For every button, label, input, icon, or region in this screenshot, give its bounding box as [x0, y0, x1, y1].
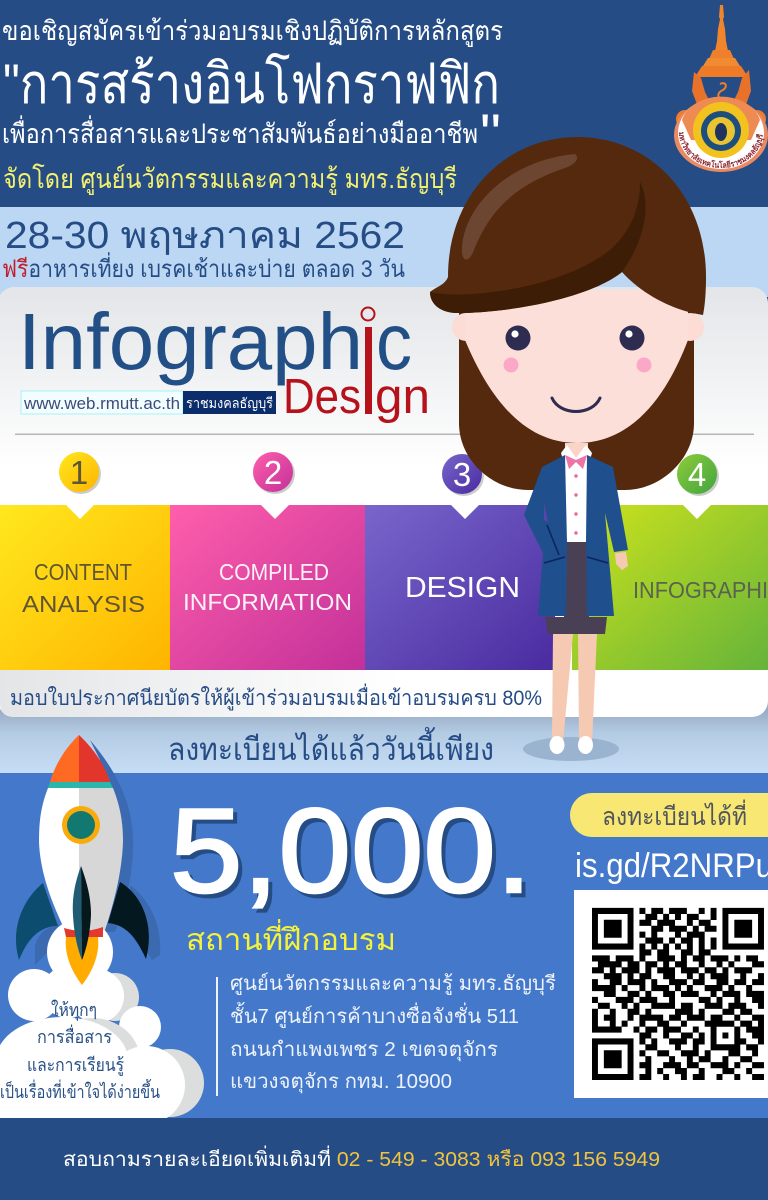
body left	[39, 788, 79, 930]
window	[62, 806, 100, 844]
subtitle: course purpose: เพื่อการสื่อสารและประชาสัมพันธ์อย่างมืออาชีพ	[2, 115, 478, 149]
price: 5,000.	[170, 784, 532, 918]
shirt buttons	[574, 474, 578, 535]
step 2 column: compiled information: COMPILED	[219, 559, 329, 585]
venue address: ถนนกำแพงเพชร 2 เขตจตุจักร	[230, 1039, 498, 1062]
rocket illustration	[0, 735, 204, 1124]
step number 3	[442, 454, 484, 496]
heading: invitation line: ขอเชิญสมัครเข้าร่วมอบรมเชิงปฏิบัติการหลักสูตร	[2, 16, 503, 47]
website tag	[21, 391, 276, 414]
rocket caption: เป็นเรื่องที่เข้าใจได้ง่ายขึ้น	[0, 1079, 160, 1102]
exhaust cloud second tier	[8, 966, 139, 1023]
QR code	[574, 890, 768, 1098]
step 2 column: compiled information	[170, 505, 365, 670]
step 4 column: infographic	[572, 505, 768, 670]
free meals note: ฟรีอาหารเที่ยง เบรคเช้าและบ่าย ตลอด 3 วัน	[2, 252, 405, 283]
eyes	[506, 326, 530, 350]
venue heading: สถานที่ฝึกอบรม	[186, 919, 396, 957]
hair highlight	[462, 154, 577, 260]
organiser line: จัดโดย ศูนย์นวัตกรรมและความรู้ มทร.ธัญบุรี	[3, 163, 457, 196]
front hair	[430, 137, 706, 315]
character illustration	[430, 137, 706, 761]
title: course name: "การสร้างอินโฟกราฟฟิก	[3, 52, 500, 115]
Infographic wordmark: c	[376, 297, 412, 386]
hand	[615, 552, 628, 570]
step 1 column: content analysis	[0, 505, 170, 670]
registration pill	[570, 793, 768, 837]
step 3 column: design	[365, 505, 555, 670]
university logo	[674, 5, 768, 172]
footer background	[0, 1118, 768, 1200]
fringe shadow	[430, 182, 646, 313]
body right	[79, 788, 123, 930]
flame	[66, 937, 98, 985]
cheeks	[504, 358, 518, 372]
exhaust cloud top puff	[47, 919, 113, 985]
Infographic wordmark: Des	[283, 370, 361, 424]
registration pill: ลงทะเบียนได้ที่	[602, 799, 747, 831]
step 2 column: compiled information: INFORMATION	[183, 589, 352, 615]
step 1 column: content analysis: ANALYSIS	[22, 591, 145, 617]
certificate note: มอบใบประกาศนียบัตรให้ผู้เข้าร่วมอบรมเมื่อเข้าอบรมครบ 80%	[10, 683, 542, 711]
bow collar	[565, 455, 587, 469]
face	[465, 290, 688, 443]
step number 4	[677, 454, 719, 496]
Infographic wordmark: Infograph	[18, 297, 363, 386]
step number 4: 4	[688, 456, 706, 493]
exhaust cloud base	[0, 1046, 204, 1124]
rocket caption: ให้ทุกๆ	[51, 999, 97, 1021]
logo ring lettering	[679, 132, 763, 168]
smile	[552, 398, 600, 412]
skirt	[545, 542, 607, 634]
teal stripe	[48, 782, 113, 788]
venue address: ชั้น7 ศูนย์การค้าบางซื่อจังชั่น 511	[230, 1002, 519, 1029]
step number 2	[253, 452, 295, 494]
website tag: www.web.rmutt.ac.th	[23, 394, 180, 413]
character shadow	[523, 737, 619, 761]
rocket shadow	[35, 740, 160, 965]
venue address	[230, 972, 556, 1094]
legs	[552, 634, 597, 743]
shirt	[565, 457, 587, 542]
left wing	[16, 883, 58, 960]
red collar	[64, 927, 103, 937]
step number 2: 2	[264, 454, 282, 491]
rocket caption: และการเรียนรู้	[27, 1055, 124, 1076]
blue registration section background	[0, 773, 768, 1118]
closing quote mark: "	[480, 102, 501, 165]
university logo: มหาวิทยาลัยเทคโนโลยีราชมงคลธัญบุรี	[678, 132, 764, 168]
rocket caption: การสื่อสาร	[37, 1024, 112, 1047]
center fin	[73, 866, 82, 960]
Infographic wordmark	[18, 297, 430, 424]
footer contact line: สอบถามรายละเอียดเพิ่มเติมที่ 02 - 549 - 3083 หรือ 093 156 5949	[63, 1145, 660, 1171]
website tag: ราชมงคลธัญบุรี	[186, 395, 273, 412]
exhaust cloud third tier	[0, 1006, 161, 1103]
rocket caption	[0, 999, 160, 1102]
jacket	[524, 455, 628, 616]
step 1 column: content analysis: CONTENT	[34, 559, 132, 585]
white main panel	[0, 287, 768, 717]
Infographic wordmark: gn	[375, 370, 430, 424]
neck and collar	[565, 443, 588, 460]
step number 1: 1	[70, 454, 88, 491]
shoes	[550, 736, 564, 754]
price: 5,000.	[174, 788, 536, 922]
step 3 column: design: DESIGN	[405, 572, 520, 604]
ears	[452, 313, 480, 341]
header background	[0, 0, 768, 207]
back hair	[459, 300, 694, 490]
registration heading: ลงทะเบียนได้แล้ววันนี้เพียง	[168, 727, 494, 767]
step number 1	[59, 452, 101, 494]
date: 28-30 พฤษภาคม 2562	[5, 215, 405, 257]
certificate strip shading	[0, 670, 400, 717]
nose cone	[50, 735, 79, 782]
venue address: ศูนย์นวัตกรรมและความรู้ มทร.ธัญบุรี	[230, 972, 556, 996]
right wing	[108, 882, 149, 959]
step number 3: 3	[453, 456, 471, 493]
venue address: แขวงจตุจักร กทม. 10900	[230, 1071, 452, 1094]
lower light band	[0, 700, 768, 774]
light blue date band	[0, 207, 768, 297]
